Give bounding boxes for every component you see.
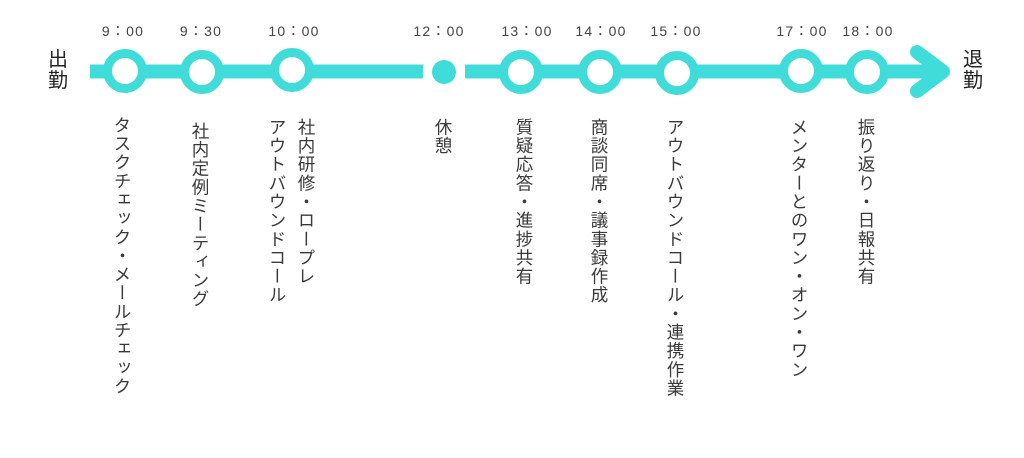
end label: 退 — [963, 49, 983, 71]
marker 10:00 — [274, 52, 310, 88]
time 10:00: 10：00 — [268, 23, 320, 39]
marker 9:30 — [184, 54, 220, 90]
task 10:00 training: 社内研修・ロープレ — [296, 118, 316, 286]
start label: 出 — [48, 49, 68, 71]
time 12:00: 12：00 — [413, 23, 465, 39]
time 18:00: 18：00 — [842, 23, 894, 39]
marker 9:00 — [108, 54, 142, 88]
arrow head — [917, 52, 943, 91]
task 9:30: 社内定例ミーティング — [190, 122, 210, 308]
time 14:00: 14：00 — [575, 23, 627, 39]
task 18:00: 振り返り・日報共有 — [856, 118, 876, 286]
task 9:00: タスクチェック・メールチェック — [112, 116, 132, 396]
marker 12:00 — [432, 60, 456, 84]
marker 18:00 — [850, 54, 884, 90]
task 10:00 outbound: アウトバウンドコール — [267, 118, 287, 304]
time 9:30: 9：30 — [180, 23, 222, 39]
task 17:00: メンターとのワン・オン・ワン — [789, 118, 809, 379]
marker 17:00 — [784, 54, 818, 88]
start label — [48, 49, 68, 92]
time 13:00: 13：00 — [501, 23, 553, 39]
end label: 勤 — [963, 70, 983, 92]
task 12:00: 休憩 — [433, 118, 453, 155]
timeline bar: afternoon — [465, 64, 940, 78]
end label — [963, 49, 983, 92]
time 15:00: 15：00 — [650, 23, 702, 39]
task 15:00: アウトバウンドコール・連携作業 — [665, 118, 685, 398]
time 17:00: 17：00 — [776, 23, 828, 39]
marker 15:00 — [660, 56, 694, 90]
timeline bar: morning — [90, 64, 423, 78]
task 13:00: 質疑応答・進捗共有 — [514, 118, 534, 286]
marker 14:00 — [582, 54, 618, 90]
time 9:00: 9：00 — [102, 23, 144, 39]
marker 13:00 — [504, 54, 538, 90]
task 14:00: 商談同席・議事録作成 — [589, 118, 609, 304]
start label: 勤 — [48, 70, 68, 92]
